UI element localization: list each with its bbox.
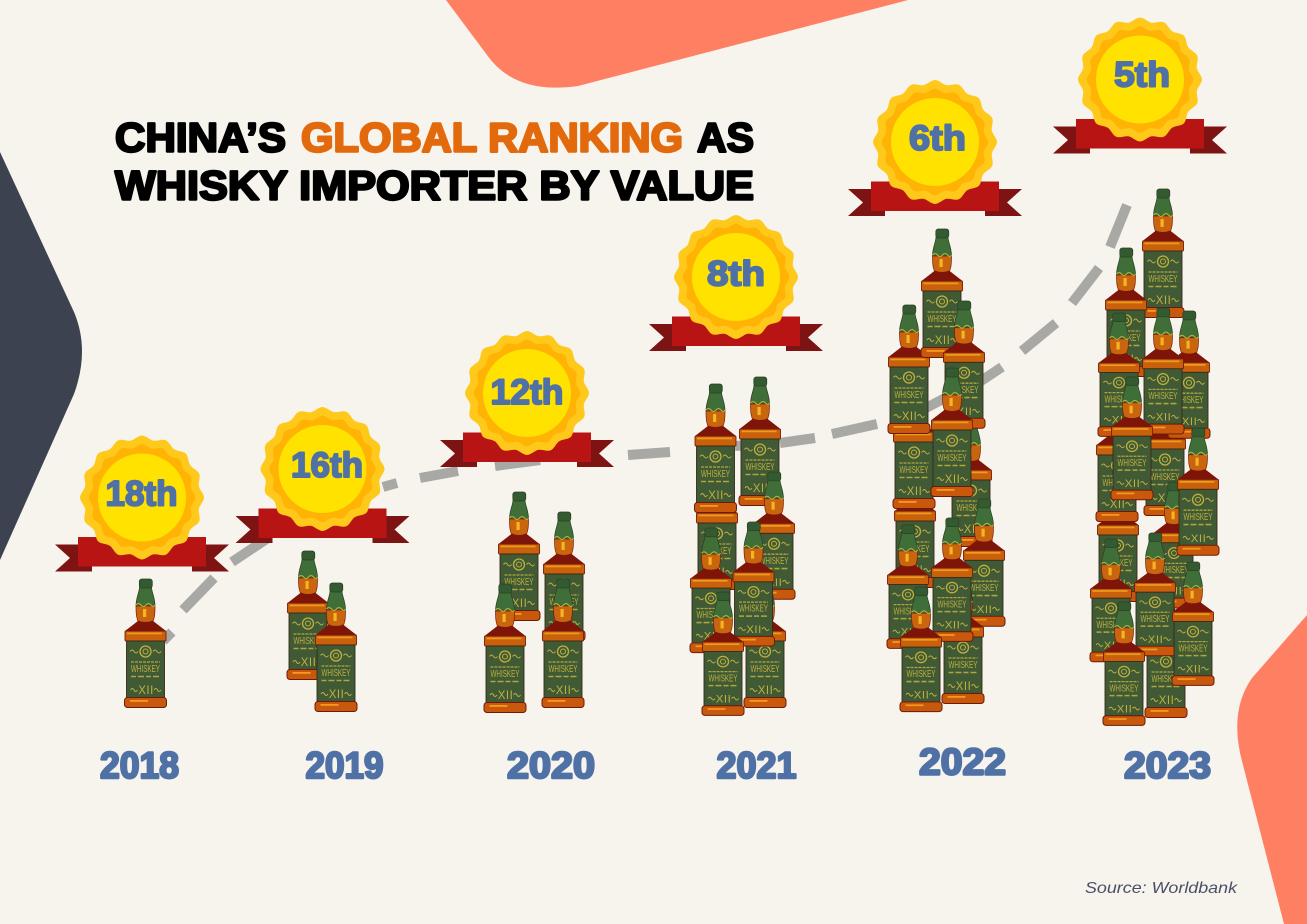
bottle xyxy=(542,579,584,708)
bottle xyxy=(694,384,736,512)
medal 16th: 16th xyxy=(291,446,363,485)
bottles 2023 xyxy=(1090,189,1219,725)
bottle xyxy=(894,459,936,588)
bottle xyxy=(732,522,774,646)
year labels: 2023 xyxy=(1124,745,1211,786)
bottle xyxy=(963,499,1005,626)
medal 5th xyxy=(1053,18,1227,154)
source note: Source: Worldbank xyxy=(1085,880,1238,897)
bottle xyxy=(690,528,732,653)
bottle xyxy=(888,305,930,434)
bottles 2020 xyxy=(484,492,585,712)
decorative coral shape: top xyxy=(446,0,908,88)
bottle xyxy=(900,587,942,712)
medal 16th xyxy=(236,407,410,543)
bottles 2022 xyxy=(887,229,1005,712)
bottle xyxy=(1134,533,1176,656)
bottle xyxy=(1096,393,1138,522)
title xyxy=(115,114,754,208)
medal 6th xyxy=(848,80,1022,216)
bottle xyxy=(921,229,963,358)
year labels: 2021 xyxy=(716,745,796,786)
bottles 2018 xyxy=(124,579,166,708)
year labels: 2020 xyxy=(507,745,595,786)
title: GLOBAL RANKING xyxy=(301,114,683,160)
decorative navy shape: left xyxy=(0,152,82,560)
bottle xyxy=(1111,377,1153,500)
bottle xyxy=(1142,189,1184,318)
year labels: 2019 xyxy=(306,745,384,786)
medal 8th xyxy=(649,215,823,351)
decorative coral shape: bottom right xyxy=(1237,615,1307,924)
bottle xyxy=(315,583,357,712)
bottle xyxy=(1144,387,1186,516)
bottle xyxy=(1142,308,1184,434)
medal 18th xyxy=(55,436,229,572)
bottles 2021 xyxy=(690,377,795,715)
bottle xyxy=(1098,313,1140,436)
bottle xyxy=(1153,482,1195,608)
year labels xyxy=(100,742,1211,786)
bottle xyxy=(739,377,781,506)
bottle xyxy=(931,368,973,496)
bottle xyxy=(931,518,973,641)
medal 8th: 8th xyxy=(707,254,765,294)
bottle xyxy=(543,512,585,640)
medal 12th: 12th xyxy=(490,373,564,412)
bottle xyxy=(1145,589,1187,718)
bottles 2019 xyxy=(287,551,357,712)
bottle xyxy=(893,380,935,508)
bottle xyxy=(702,592,744,715)
bottle xyxy=(484,584,526,712)
bottle xyxy=(753,472,795,599)
medal 12th xyxy=(440,331,614,467)
year labels: 2022 xyxy=(919,742,1006,782)
title: CHINA’S xyxy=(115,114,286,160)
title: AS xyxy=(697,114,754,160)
bottle xyxy=(124,579,166,708)
medal 18th: 18th xyxy=(106,474,178,514)
bottle xyxy=(887,525,929,648)
bottle xyxy=(1105,248,1147,376)
bottle xyxy=(1103,602,1145,725)
bottle xyxy=(498,492,540,620)
dashed trend line xyxy=(163,205,1127,641)
bottle xyxy=(1172,562,1214,685)
bottle xyxy=(1168,311,1210,438)
title: WHISKY IMPORTER BY VALUE xyxy=(115,162,754,208)
bottle xyxy=(1177,428,1219,555)
medal 5th: 5th xyxy=(1114,56,1170,94)
bottle xyxy=(1090,539,1132,662)
bottle xyxy=(696,461,738,590)
bottle xyxy=(950,418,992,546)
medal 6th: 6th xyxy=(909,119,966,158)
bottle xyxy=(287,551,329,680)
bottle xyxy=(744,579,786,708)
year labels: 2018 xyxy=(100,745,179,786)
bottle xyxy=(942,575,984,704)
bottle xyxy=(943,301,985,428)
bottle xyxy=(1097,473,1139,602)
